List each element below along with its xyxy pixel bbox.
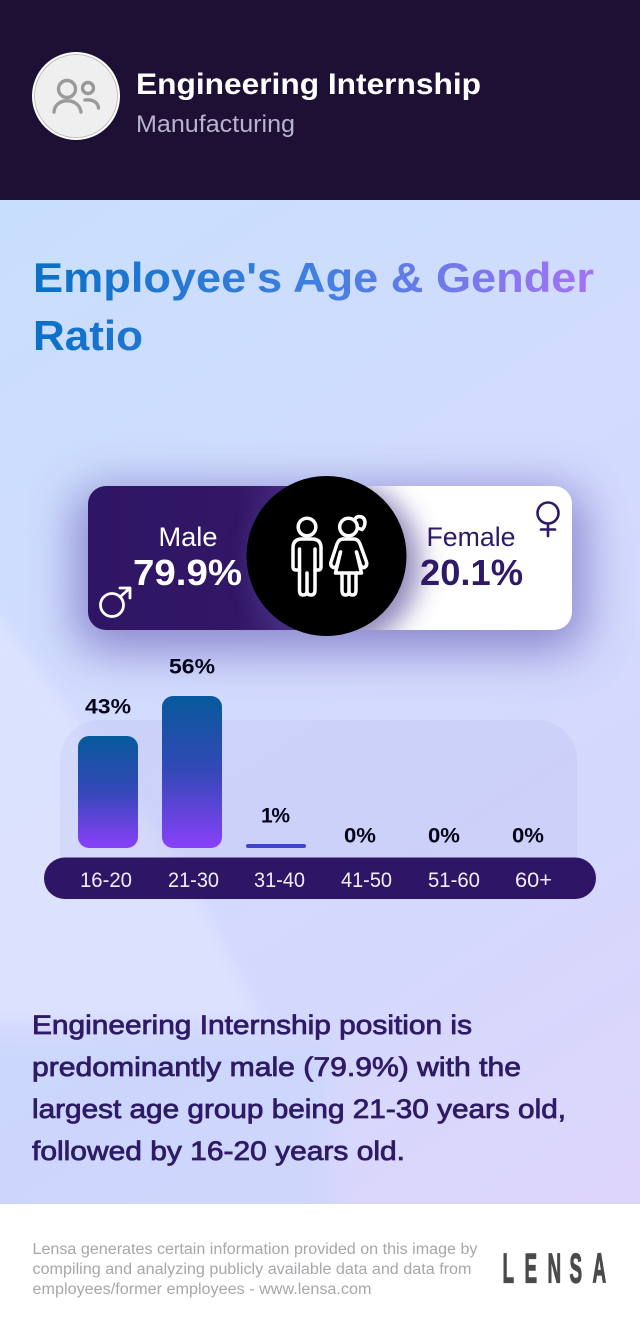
heading (33, 254, 594, 359)
value 60+: 0% (512, 824, 544, 848)
value 41-50: 0% (344, 824, 376, 848)
bar 31-40: 1% (261, 804, 290, 828)
heading: Ratio (33, 312, 143, 359)
center circle with figures (246, 476, 406, 636)
female label and value: 20.1% (420, 552, 523, 593)
bar 21-30 (162, 656, 222, 848)
summary text: followed by 16-20 years old. (32, 1136, 405, 1166)
bar 16-20 (78, 696, 138, 848)
male label and value: Male (158, 522, 218, 552)
summary text (32, 1010, 566, 1166)
disclaimer: compiling and analyzing publicly available data and data from (32, 1261, 471, 1278)
axis pill with age labels: 41-50 (341, 869, 392, 892)
logo: LENSA: LENSA (502, 1245, 606, 1292)
summary text: Engineering Internship position is (32, 1010, 472, 1040)
female label and value: Female (426, 522, 516, 552)
axis pill with age labels (44, 858, 596, 899)
bar 21-30: 56% (169, 656, 215, 678)
industry subtitle: Manufacturing (136, 111, 295, 138)
center circle shadow (252, 480, 420, 648)
male label and value: 79.9% (133, 552, 242, 593)
axis pill with age labels: 51-60 (428, 869, 480, 892)
icon: male symbol (100, 588, 130, 616)
axis pill with age labels: 31-40 (254, 869, 305, 892)
icon: female symbol (538, 502, 558, 536)
page background (0, 200, 640, 1224)
summary text: predominantly male (79.9%) with the (32, 1052, 521, 1082)
disclaimer: employees/former employees - www.lensa.com (32, 1281, 372, 1298)
panel: gender ratio (76, 476, 584, 650)
male side (88, 486, 326, 630)
bar 16-20: 43% (85, 696, 131, 718)
chart: age distribution (44, 656, 596, 899)
icon: girl figure (331, 516, 367, 595)
axis pill with age labels: 21-30 (168, 869, 219, 892)
female label and value (420, 522, 523, 593)
value 51-60: 0% (428, 824, 460, 848)
axis pill with age labels: 16-20 (80, 869, 132, 892)
bar 31-40 (246, 804, 306, 848)
header band (0, 0, 640, 200)
footer (0, 1204, 640, 1332)
heading: Employee's Age & Gender (33, 254, 594, 301)
icon: people avatar (32, 52, 120, 140)
job title: Engineering Internship (136, 68, 481, 101)
disclaimer: Lensa generates certain information provided on this image by (32, 1241, 478, 1258)
male label and value (133, 522, 242, 593)
icon: boy figure (293, 518, 321, 595)
female side (280, 486, 572, 630)
disclaimer (32, 1241, 478, 1298)
axis pill with age labels: 60+ (515, 869, 552, 892)
summary text: largest age group being 21-30 years old, (32, 1094, 566, 1124)
